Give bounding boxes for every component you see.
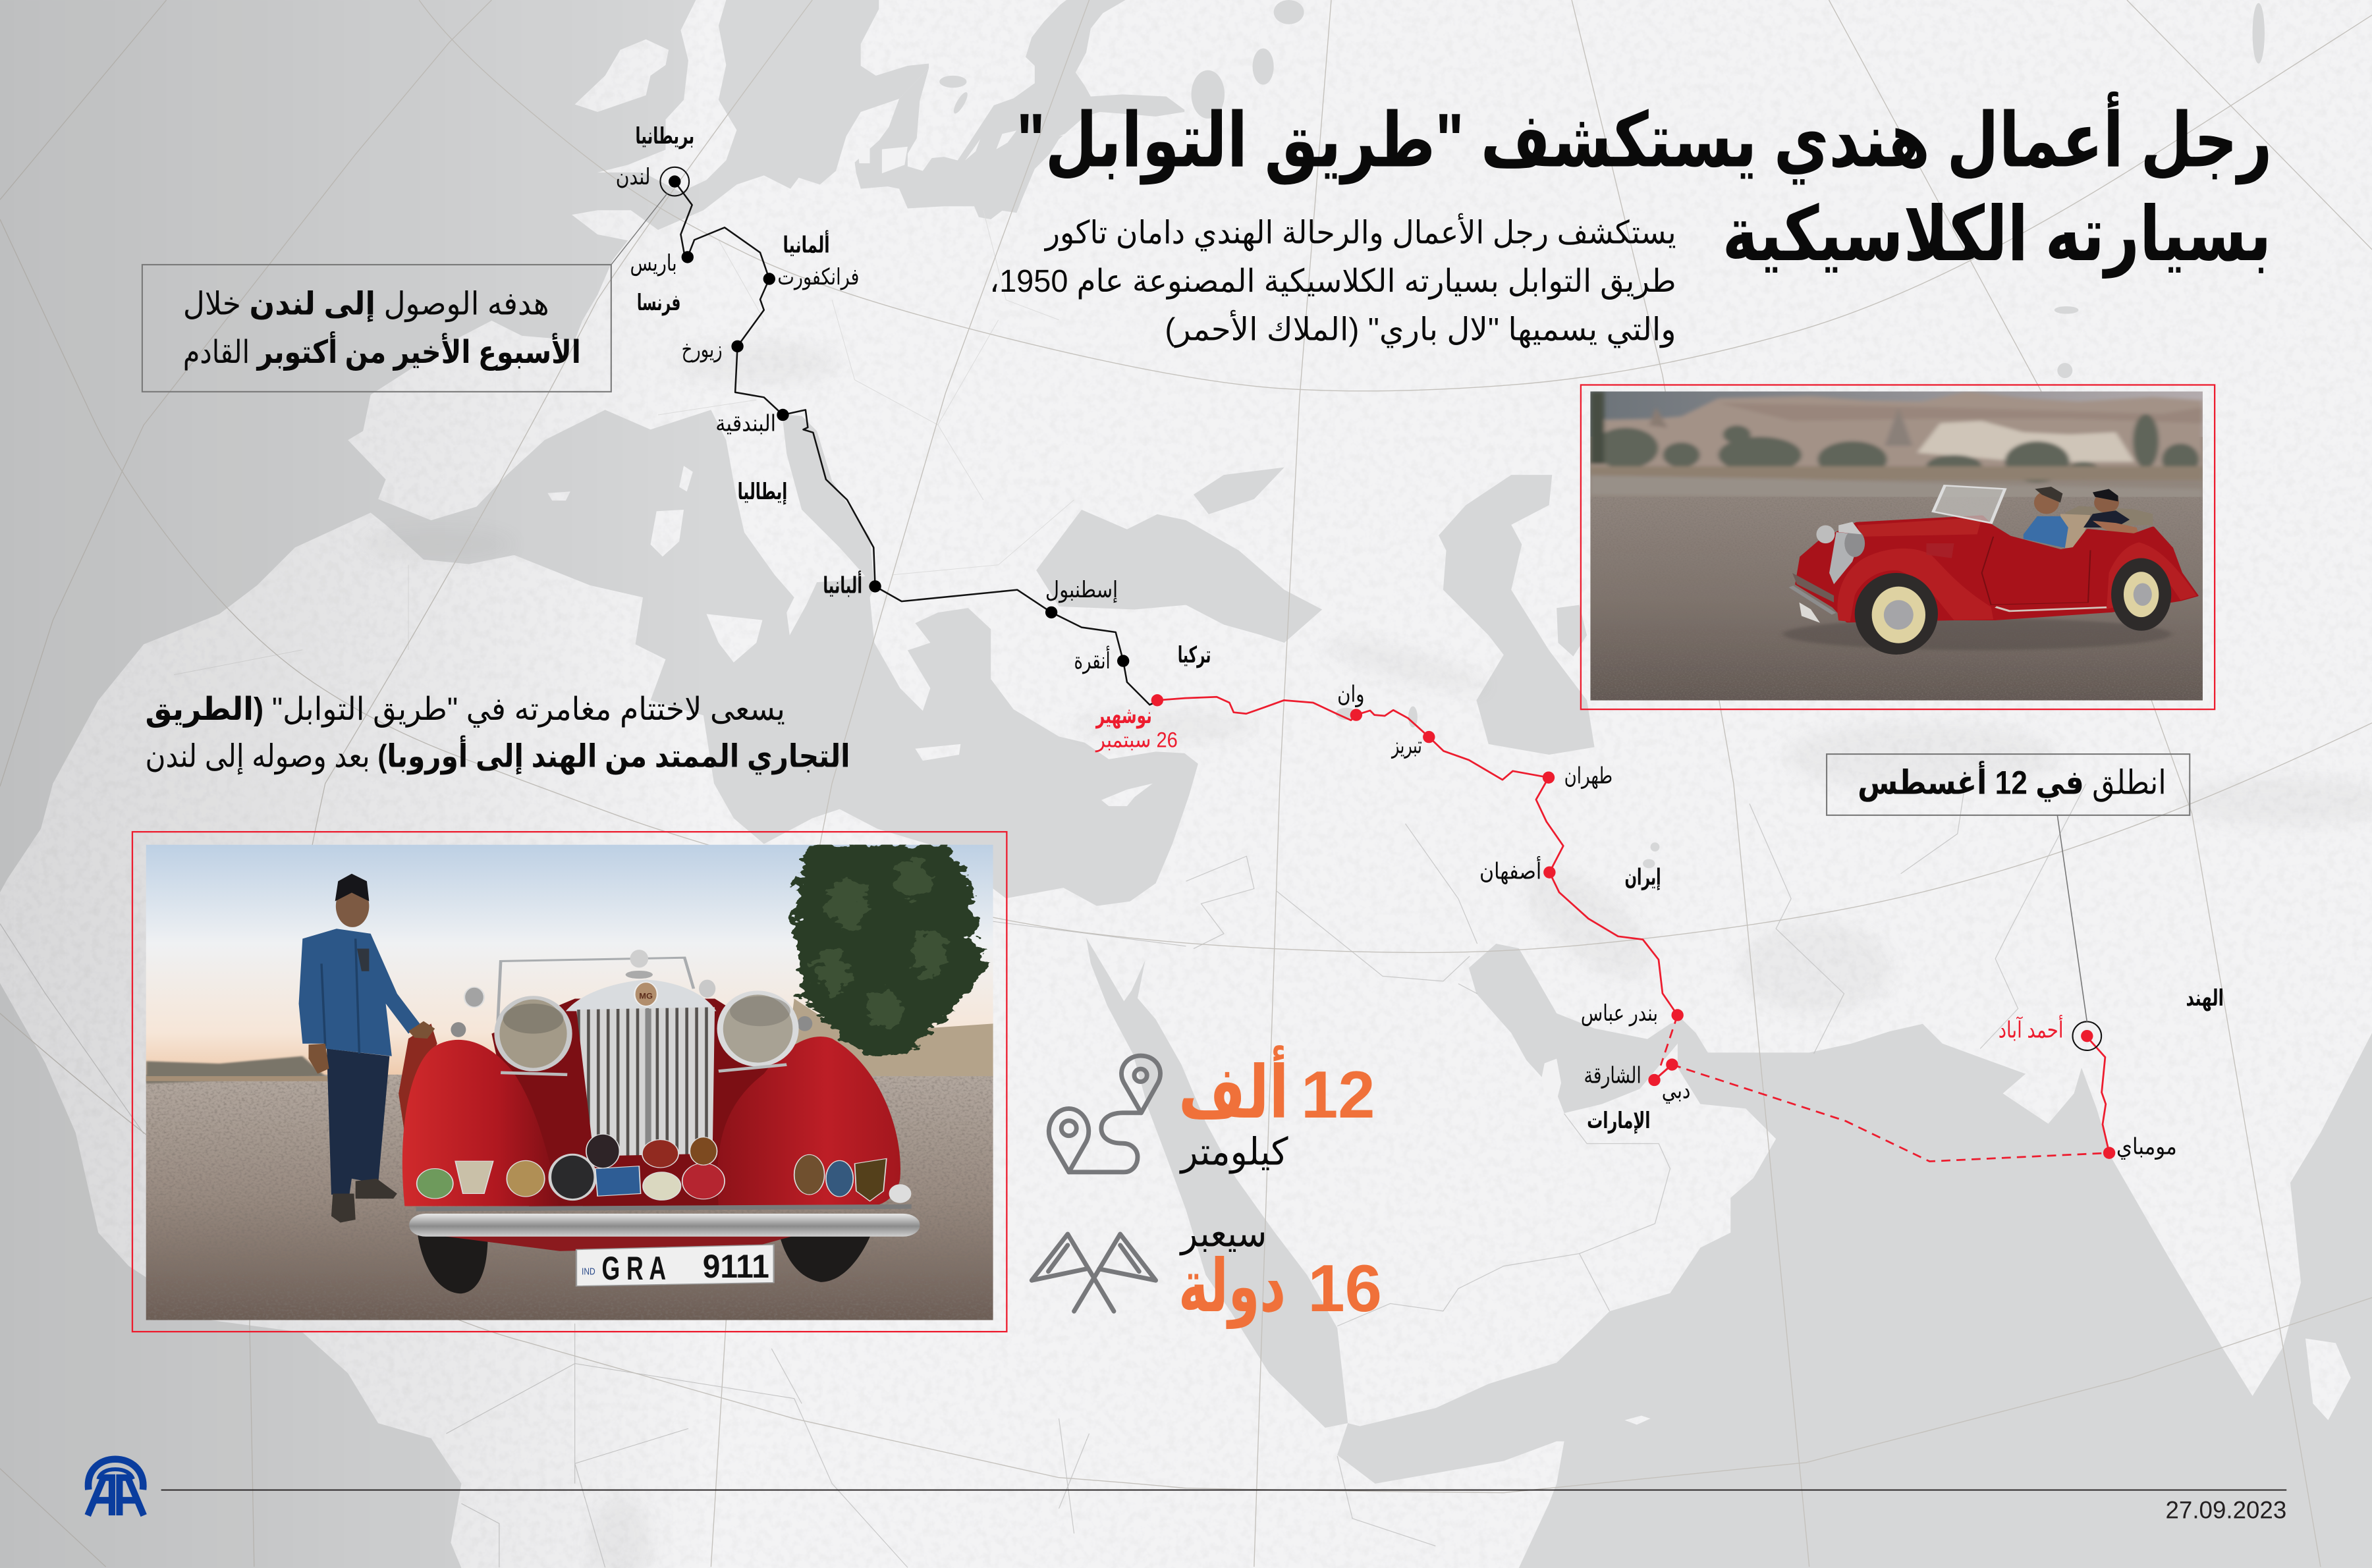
route: red segment Nevsehir to Ahmedabad — [1151, 694, 2115, 1162]
cliffs and trees — [1590, 391, 2203, 502]
tires — [418, 1233, 488, 1293]
number plate: G R A — [601, 1250, 666, 1287]
intro text — [989, 213, 1676, 348]
Ahmedabad marker ring — [2073, 1021, 2101, 1050]
stat: 16 countries: دولة — [1178, 1246, 1286, 1329]
route: black segment London to Nevsehir — [660, 167, 1157, 705]
text block: spice route explanation: التجاري الممتد من الهند إلى أوروبا) بعد وصوله إلى لندن — [145, 735, 850, 774]
date: 27.09.2023 — [2166, 1497, 2286, 1524]
Iran label: إيران — [1625, 865, 1661, 890]
Paris label: باريس — [630, 251, 677, 276]
Zurich label: زيورخ — [682, 337, 723, 363]
car shadow — [1783, 618, 2171, 650]
headlights — [497, 998, 570, 1069]
callout: goal to reach London — [142, 194, 667, 392]
London label: لندن — [616, 165, 651, 190]
terrain shading — [363, 342, 2372, 1568]
India label: الهند — [2186, 986, 2224, 1012]
grille and lamps — [1829, 532, 1862, 584]
Van label: وان — [1337, 682, 1364, 708]
callout: goal to reach London: هدفه الوصول إلى لندن خلال — [183, 286, 549, 323]
Ahmedabad label: أحمد آباد — [1999, 1014, 2064, 1042]
Ankara label: أنقرة — [1074, 645, 1111, 674]
Italy label: إيطاليا — [738, 479, 787, 505]
MG badge — [634, 982, 657, 1006]
Venice label: البندقية — [715, 412, 776, 437]
title — [1016, 92, 2272, 279]
stat: 16 countries: 16 — [1308, 1252, 1382, 1326]
distant rocks — [786, 998, 993, 1076]
stat: 12 thousand km — [1049, 1045, 1375, 1174]
icon: map route with two pins — [1049, 1056, 1160, 1172]
callout: started on 12 August: انطلق في 12 أغسطس — [1858, 761, 2166, 802]
Albania label: ألبانيا — [823, 570, 862, 598]
car body — [491, 998, 786, 1208]
MG badge: MG — [639, 992, 653, 1001]
Britain label: بريطانيا — [636, 124, 694, 149]
UAE label: الإمارات — [1587, 1108, 1651, 1133]
stat: 12 thousand km: 12 — [1301, 1058, 1375, 1132]
Isfahan label: أصفهان — [1479, 855, 1541, 884]
Frankfurt label: فرانكفورت — [777, 265, 859, 290]
intro text: طريق التوابل بسيارته الكلاسيكية المصنوعة عام 1950، — [989, 263, 1676, 300]
panel: driving car photo — [1581, 385, 2215, 709]
London marker — [660, 167, 689, 196]
borders — [0, 210, 2086, 1567]
number plate: IND — [582, 1266, 595, 1277]
windscreen frame — [498, 958, 694, 1023]
callout: goal to reach London: الأسبوع الأخير من أكتوبر القادم — [183, 331, 581, 371]
Tehran label: طهران — [1564, 764, 1613, 790]
man — [299, 874, 435, 1222]
stat: 16 countries: سيعبر — [1179, 1212, 1267, 1255]
icon: crossed flags — [1032, 1234, 1156, 1311]
land: Ireland — [575, 40, 669, 112]
passenger — [2083, 489, 2139, 535]
number plate — [576, 1245, 774, 1287]
logo: Anadolu Agency — [88, 1459, 144, 1515]
date 26 September: 26 سبتمبر — [1095, 728, 1178, 753]
car body — [1797, 516, 2197, 622]
number plate: 9111 — [703, 1248, 769, 1285]
Sharjah label: الشارقة — [1584, 1063, 1641, 1088]
chrome cowl — [566, 980, 716, 1011]
stat: 16 countries — [1032, 1212, 1382, 1329]
footer rule — [161, 1490, 2286, 1491]
intro text: والتي يسميها "لال باري" (الملاك الأحمر) — [1165, 310, 1676, 348]
Istanbul label: إسطنبول — [1045, 578, 1118, 603]
rear wheel — [2111, 558, 2171, 631]
badges — [417, 1134, 911, 1203]
poplar tree — [794, 845, 991, 1059]
windscreen — [1933, 485, 2005, 523]
Nevsehir label: نوشهير — [1095, 703, 1152, 729]
bumper — [416, 1206, 912, 1209]
Baltic islands — [858, 125, 1088, 173]
stat: 12 thousand km: ألف — [1178, 1045, 1289, 1133]
driver — [2024, 487, 2068, 548]
seas: Baltic, Black Sea, Azov, Caspian, Persian Gulf, Red Sea — [855, 0, 1184, 219]
Dubai label: دبي — [1662, 1078, 1690, 1104]
callout: started on 12 August — [1827, 754, 2190, 1022]
land: Great Britain — [597, 0, 736, 192]
Turkey label: تركيا — [1178, 643, 1211, 668]
lakes — [939, 0, 2265, 868]
text block: spice route explanation — [145, 691, 850, 774]
front wheel — [1855, 573, 1938, 655]
text block: spice route explanation: يسعى لاختتام مغامرته في "طريق التوابل" (الطريق — [145, 691, 785, 728]
stat: 12 thousand km: كيلومتر — [1179, 1131, 1288, 1174]
Mumbai label: مومباي — [2116, 1134, 2177, 1160]
intro text: يستكشف رجل الأعمال والرحالة الهندي دامان تاكور — [1044, 213, 1676, 252]
Bandar Abbas label: بندر عباس — [1581, 1001, 1658, 1026]
land: islands — [547, 466, 2351, 1424]
grille — [576, 1007, 715, 1156]
passengers baggage and seats — [2065, 506, 2153, 526]
open door — [399, 1023, 437, 1133]
Germany label: ألمانيا — [783, 230, 830, 258]
France label: فرنسا — [637, 290, 680, 316]
map labels — [616, 124, 2224, 1160]
Tabriz label: تبريز — [1391, 734, 1422, 759]
panel: man with car photo — [132, 832, 1007, 1332]
